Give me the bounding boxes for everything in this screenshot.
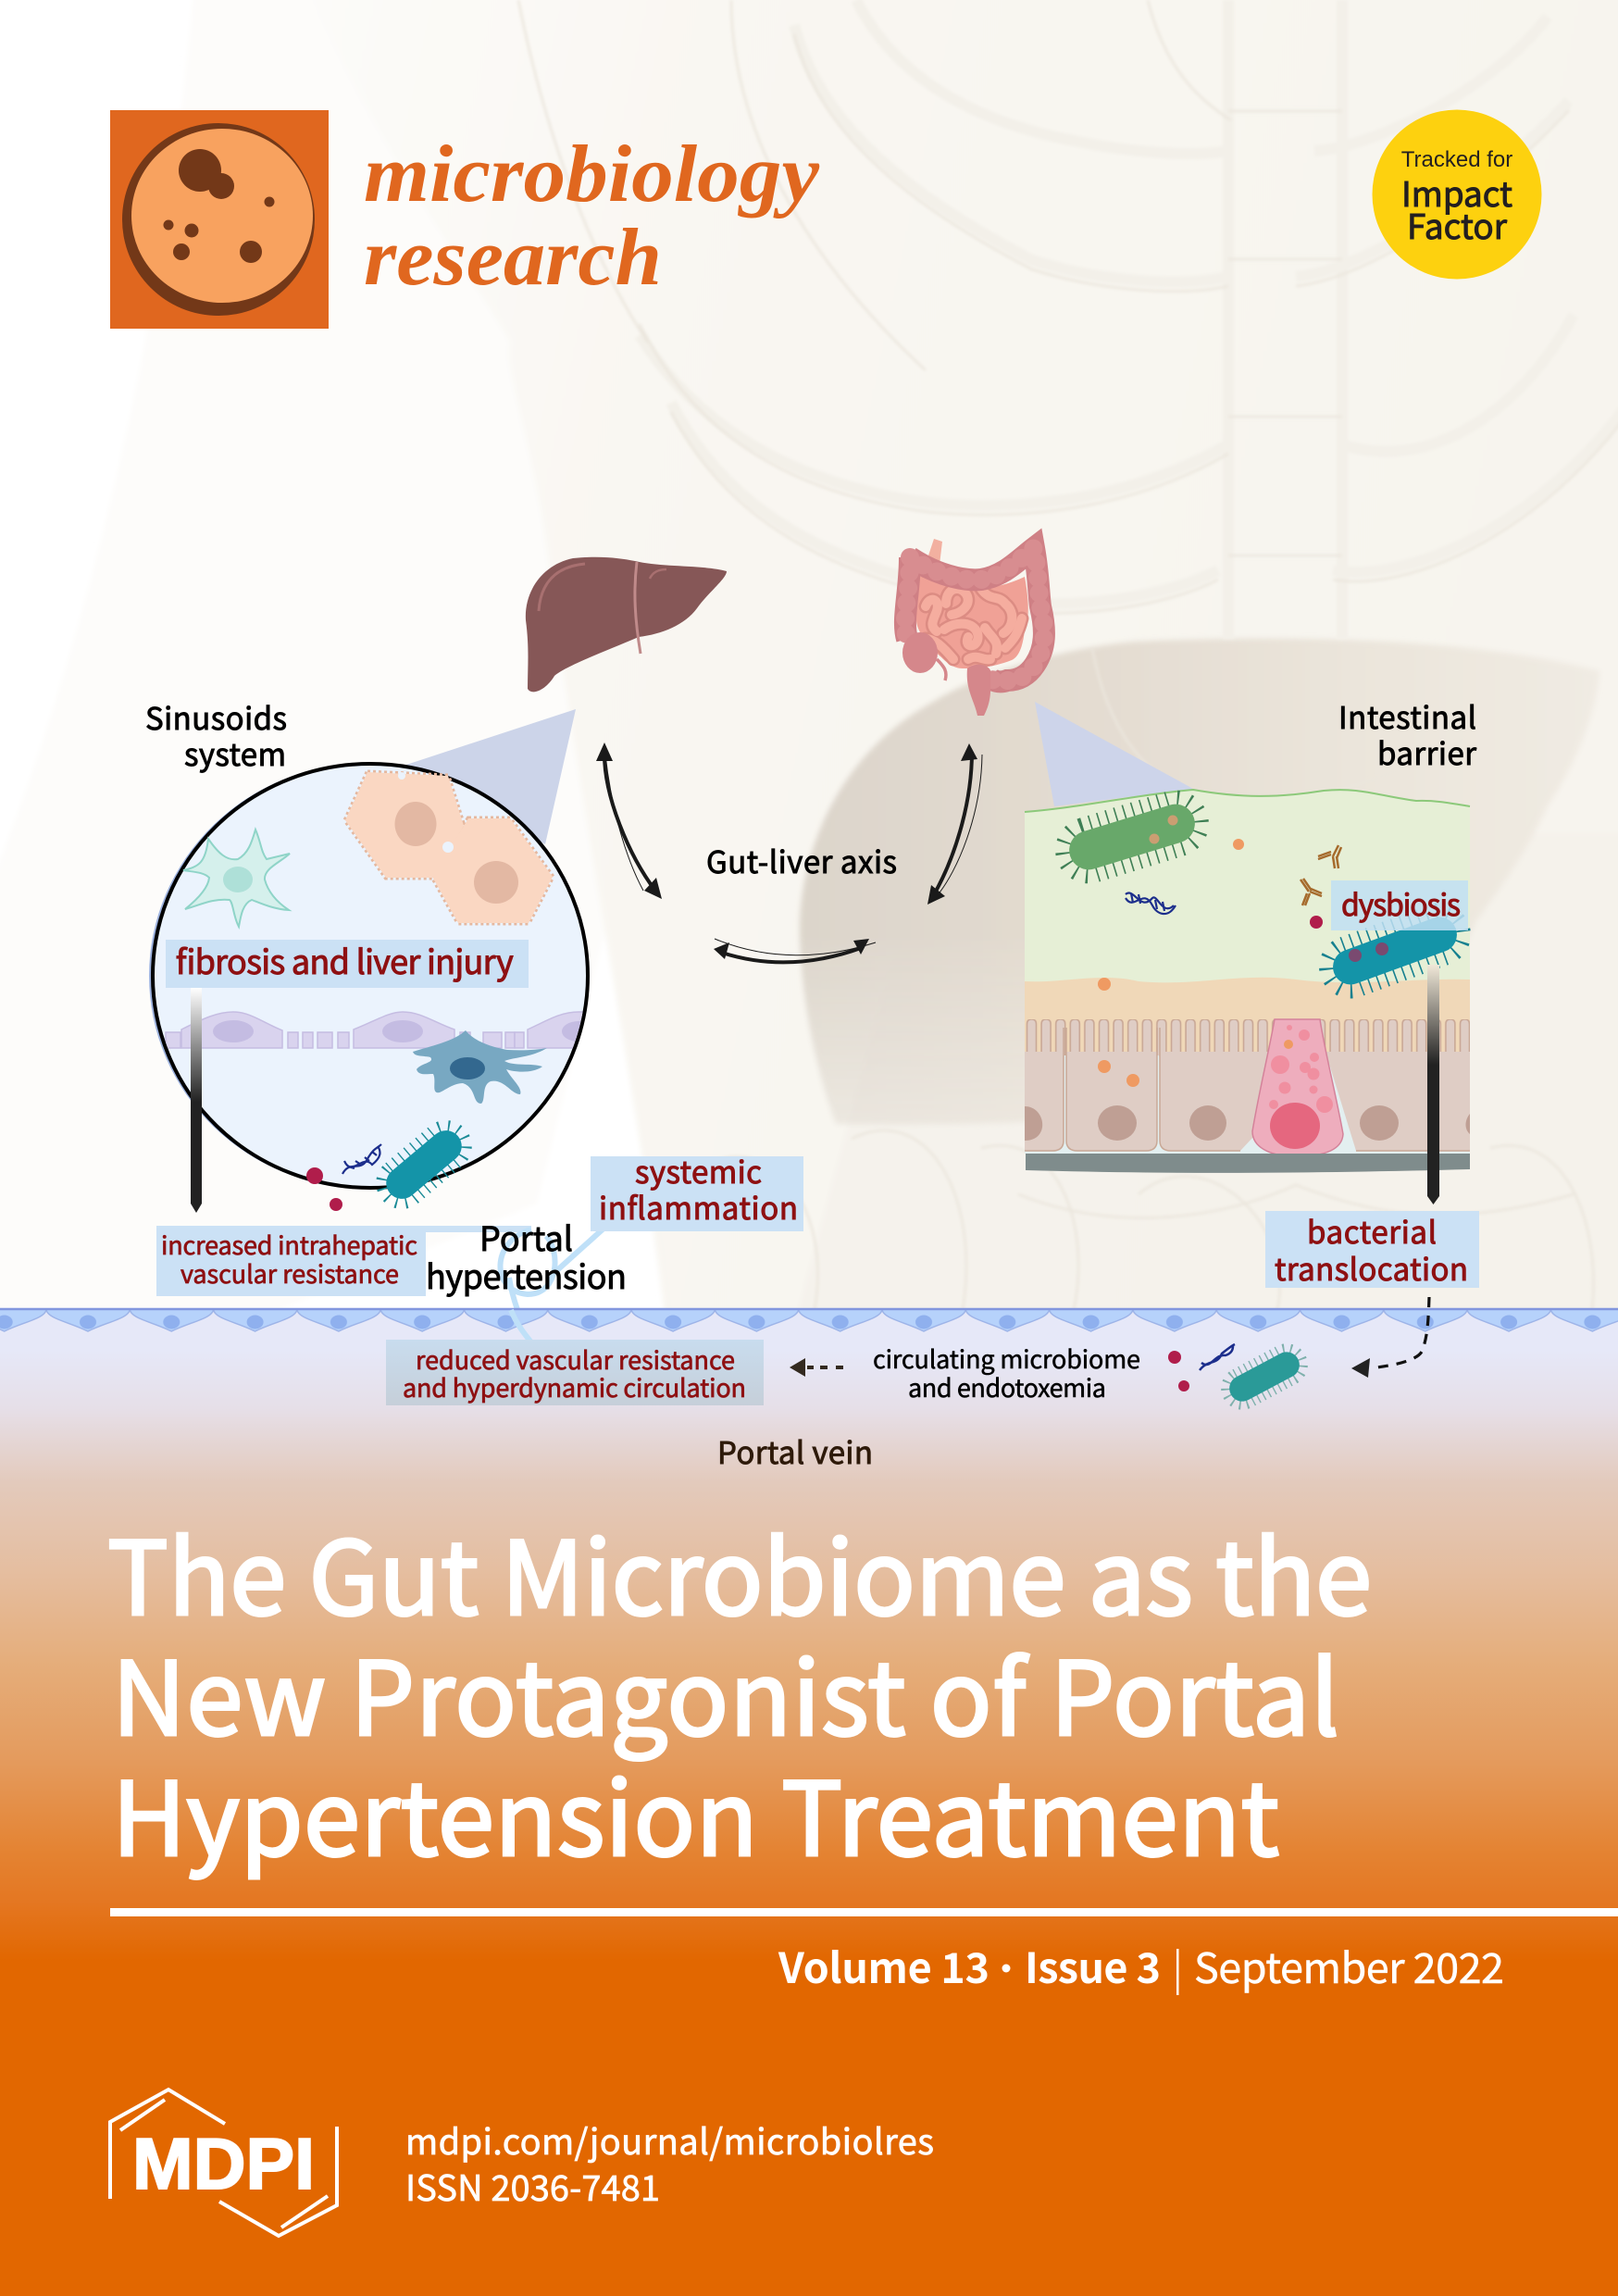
particles bbox=[306, 1167, 342, 1211]
issue info: September 2022 bbox=[1194, 1935, 1504, 1995]
label: bacterial translocation: translocation bbox=[1275, 1245, 1468, 1290]
stellate cell bbox=[183, 830, 290, 927]
cell nuclei bbox=[1025, 1105, 1470, 1141]
red particle bbox=[1310, 916, 1323, 929]
endothelium bbox=[166, 1012, 595, 1048]
icon: circulating particles and dna bbox=[1168, 1344, 1235, 1391]
logo: MDPI: MDPI bbox=[132, 2123, 315, 2204]
issue info bbox=[778, 1935, 1504, 1995]
badge: tracked for impact factor bbox=[1372, 109, 1542, 280]
arrow: translocation to circulation bbox=[1351, 1297, 1429, 1378]
label: systemic inflammation: systemic bbox=[635, 1148, 762, 1192]
journal name bbox=[364, 130, 820, 303]
title: Hypertension Treatment bbox=[112, 1737, 1279, 1885]
orange particles bbox=[1098, 839, 1244, 1087]
panel: liver sinusoid circle bbox=[149, 763, 595, 1211]
arrow: liver to axis bbox=[596, 742, 662, 899]
bar arrow: fibrosis to vascular resistance bbox=[191, 988, 202, 1213]
label: portal hypertension: Portal bbox=[479, 1213, 573, 1261]
label: intestinal barrier: barrier bbox=[1377, 730, 1476, 774]
title bbox=[107, 1496, 1372, 1885]
inclusions bbox=[1150, 815, 1177, 844]
journal url and ISSN: mdpi.com/journal/microbiolres bbox=[405, 2114, 934, 2165]
label: sinusoids system: system bbox=[184, 730, 286, 775]
label: bacterial translocation: bacterial bbox=[1307, 1208, 1437, 1253]
label: portal hypertension bbox=[426, 1213, 627, 1299]
dna bbox=[1126, 892, 1176, 914]
issue info: Issue 3 bbox=[1025, 1935, 1161, 1995]
dna bbox=[342, 1144, 381, 1174]
wedge: gut zoom bbox=[1035, 702, 1193, 806]
goblet cell bbox=[1252, 1019, 1343, 1156]
label: systemic inflammation bbox=[591, 1148, 803, 1231]
connector lines: portal hypertension bbox=[421, 1226, 604, 1342]
basement membrane bbox=[1026, 1154, 1470, 1173]
icon: intestines bbox=[902, 539, 1044, 716]
journal name: microbiology bbox=[364, 130, 820, 219]
arrow: dashed to reduced resistance bbox=[790, 1358, 843, 1377]
label: increased intrahepatic vascular resistance: increased intrahepatic bbox=[161, 1226, 417, 1262]
bacterium: teal bbox=[1328, 912, 1462, 990]
label: intestinal barrier: Intestinal bbox=[1338, 693, 1476, 738]
arrow: gut to axis bbox=[927, 743, 982, 905]
label: increased intrahepatic vascular resistance bbox=[156, 1226, 426, 1296]
inclusions bbox=[1349, 942, 1388, 962]
icon: liver bbox=[526, 557, 727, 692]
logo: MDPI bbox=[110, 2090, 337, 2236]
label: sinusoids system bbox=[145, 694, 287, 775]
bar arrow: dysbiosis to translocation bbox=[1427, 965, 1439, 1204]
hepatocytes bbox=[345, 772, 553, 923]
connector stub into reduced resistance bbox=[511, 1310, 531, 1342]
label: portal hypertension: hypertension bbox=[426, 1251, 627, 1299]
title: The Gut Microbiome as the bbox=[107, 1496, 1372, 1644]
label: circulating microbiome and endotoxemia: circulating microbiome bbox=[873, 1340, 1140, 1376]
label: intestinal barrier bbox=[1338, 693, 1476, 774]
label: bacterial translocation bbox=[1265, 1208, 1479, 1290]
label: dysbiosis: dysbiosis bbox=[1341, 882, 1461, 925]
vein endothelium band bbox=[0, 1308, 1618, 1332]
label: reduced vascular resistance: reduced vascular resistance bbox=[416, 1341, 735, 1377]
cell borders bbox=[1025, 1028, 1470, 1151]
antibodies bbox=[1301, 845, 1341, 905]
badge: tracked for impact factor: Impact bbox=[1401, 167, 1512, 217]
divider rule bbox=[110, 1908, 1618, 1916]
journal logo: petri dish bbox=[110, 110, 329, 329]
label: portal vein: Portal vein bbox=[717, 1429, 873, 1473]
badge: tracked for impact factor: Tracked for bbox=[1401, 147, 1512, 172]
label: gut-liver axis: Gut-liver axis bbox=[706, 838, 897, 882]
title: New Protagonist of Portal bbox=[112, 1616, 1339, 1765]
arrow: bottom axis bbox=[714, 939, 876, 962]
journal url and ISSN bbox=[405, 2114, 934, 2211]
label: fibrosis and liver injury: fibrosis and liver injury bbox=[176, 936, 514, 984]
label: circulating microbiome and endotoxemia bbox=[873, 1340, 1140, 1404]
label: systemic inflammation: inflammation bbox=[599, 1184, 798, 1229]
bacterium: green bbox=[1064, 799, 1200, 875]
portal vein gradient bbox=[0, 1310, 1618, 2296]
label: sinusoids system: Sinusoids bbox=[145, 694, 287, 739]
kupffer cell bbox=[413, 1030, 547, 1104]
wedge: liver zoom bbox=[406, 709, 576, 844]
bacterium: circulating bbox=[1225, 1347, 1304, 1406]
label: reduced vascular resistance bbox=[386, 1340, 764, 1405]
issue info: Volume 13 bbox=[778, 1935, 989, 1995]
epithelial cells bbox=[1025, 1052, 1470, 1151]
journal url and ISSN: ISSN 2036-7481 bbox=[405, 2160, 660, 2211]
journal name: research bbox=[364, 213, 662, 303]
badge: tracked for impact factor: Factor bbox=[1407, 199, 1508, 249]
panel: intestinal barrier bbox=[1025, 790, 1470, 1173]
label: circulating microbiome and endotoxemia: and endotoxemia bbox=[908, 1368, 1106, 1404]
background: faint human body bbox=[401, 0, 1618, 1308]
label: increased intrahepatic vascular resistance: vascular resistance bbox=[180, 1254, 399, 1291]
label: reduced vascular resistance: and hyperdynamic circulation bbox=[403, 1368, 746, 1404]
bacterium: teal bbox=[380, 1124, 468, 1205]
